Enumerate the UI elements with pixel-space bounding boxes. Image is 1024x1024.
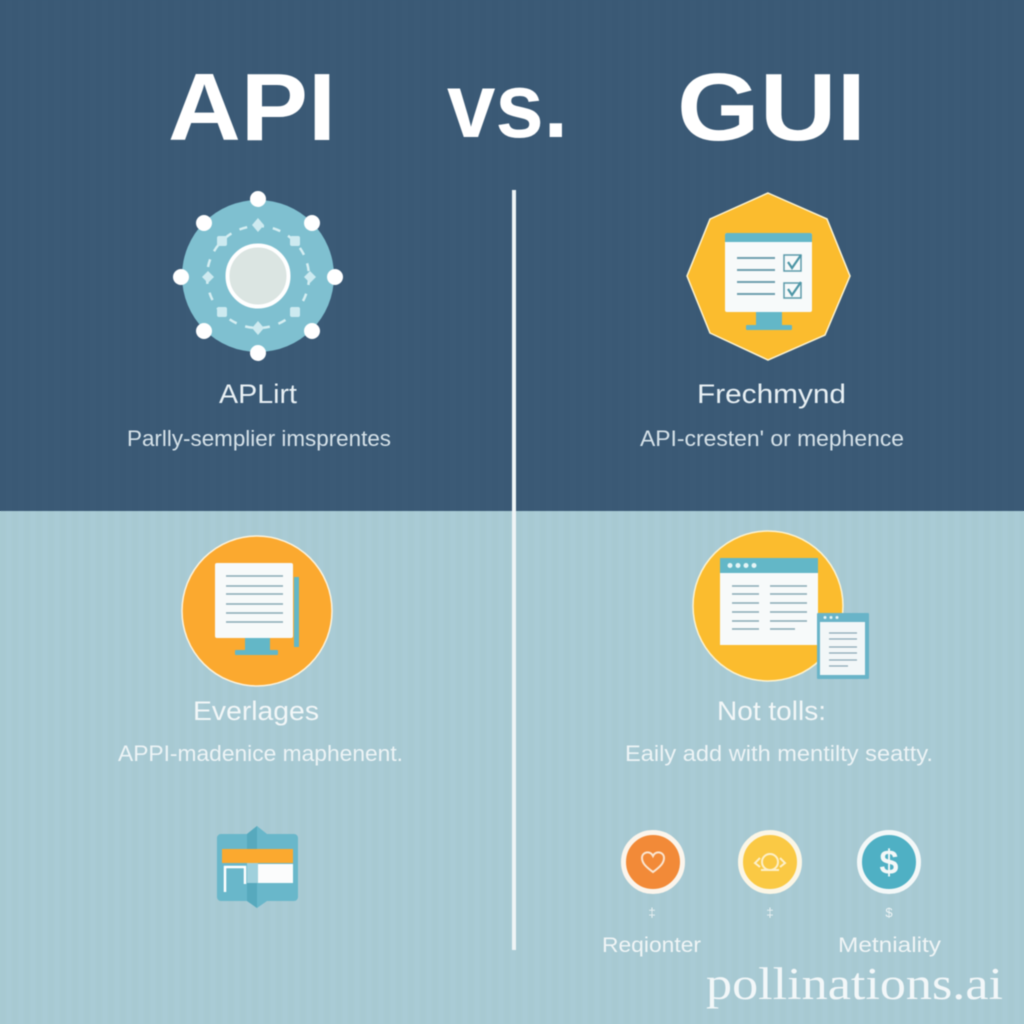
small marks under badges: $ [885,905,893,920]
icon: GUI monitor checklist [687,193,850,360]
icon: API network ring [173,191,343,361]
panel: dark top background [0,0,1024,511]
icon: teal dollar badge: $ [880,844,899,882]
center divider [512,190,516,950]
text: left top description: Parlly-semplier imsprentes [127,426,391,451]
icon: orange document monitor [182,536,332,686]
icon: yellow browser windows [693,531,869,681]
title: GUI [677,54,866,161]
heading: APLirt: APLirt [219,379,298,409]
watermark: pollinations.ai [706,959,1003,1009]
icon: yellow badge [740,832,800,892]
label: Metniality: Metniality [838,933,941,957]
small marks under badges: ‡ [766,905,774,920]
text: right bottom description: Eaily add with mentilty seatty. [625,741,933,766]
label: Reqionter: Reqionter [602,933,701,957]
heading: Not tolls: Not tolls: [717,696,826,726]
small marks under badges: ‡ [648,905,656,920]
heading: Everlages: Everlages [193,696,319,726]
text: right top description: API-cresten' or mephence [640,426,904,451]
title: vs. [447,55,568,157]
small marks under badges [648,905,893,920]
icon: orange heart badge [624,832,682,892]
text: left bottom description: APPI-madenice maphenent. [118,741,403,766]
icon: teal dollar badge [860,832,918,892]
title [168,54,866,161]
panel: light bottom background [0,511,1024,1024]
icon: folded map [217,826,298,908]
heading: Frechmynd: Frechmynd [697,379,846,409]
title: API [168,54,336,161]
